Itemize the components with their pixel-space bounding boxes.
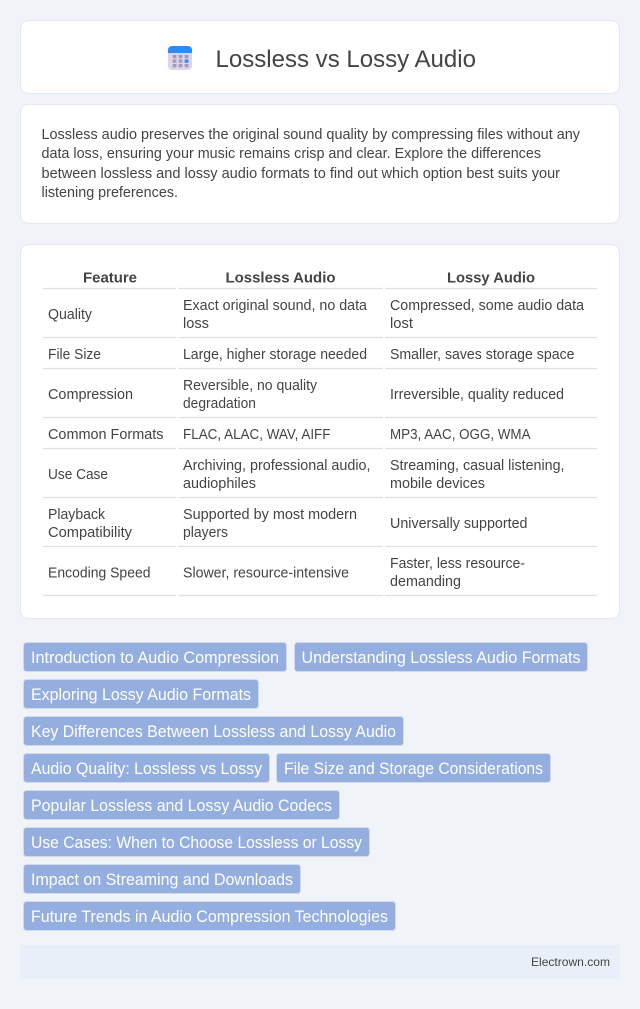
row: use case: Use Case	[48, 467, 108, 483]
tag: introduction: Introduction to Audio Compression	[31, 649, 279, 667]
tag: lossless formats: Understanding Lossless Audio Formats	[302, 649, 580, 667]
footer: Electrown.com	[531, 955, 610, 969]
panel: title header	[20, 20, 620, 94]
tag: future trends	[24, 902, 396, 930]
title: Lossless vs Lossy Audio	[216, 46, 476, 73]
table header: Lossless Audio	[226, 270, 336, 286]
row: playback compatibility	[48, 507, 528, 541]
row: quality	[48, 298, 584, 332]
row: playback compatibility: Compatibility	[48, 525, 133, 541]
row: use case: audiophiles	[183, 476, 256, 492]
table header: Feature	[83, 270, 137, 286]
row: file size: Large, higher storage needed	[183, 347, 367, 363]
row: playback compatibility: players	[183, 525, 228, 541]
row: compression: Irreversible, quality reduced	[390, 387, 564, 403]
row: encoding speed: Slower, resource-intensive	[183, 566, 349, 582]
row: file size: File Size	[48, 347, 101, 363]
row: encoding speed: Faster, less resource-	[390, 556, 525, 572]
tag: audio quality	[24, 754, 270, 782]
row: use case: Archiving, professional audio,	[183, 458, 370, 474]
panel: comparison table	[20, 244, 620, 618]
tag: file size: File Size and Storage Considerations	[284, 760, 543, 778]
row: file size	[48, 347, 575, 363]
tag: lossy formats	[24, 680, 258, 708]
tag: lossy formats: Exploring Lossy Audio Formats	[31, 686, 251, 704]
tag: streaming	[24, 864, 300, 894]
footer	[20, 945, 620, 979]
row: compression	[48, 378, 564, 412]
row: quality: Quality	[48, 307, 93, 323]
row: encoding speed	[48, 556, 525, 590]
panel: introduction	[20, 104, 620, 224]
tag: streaming: Impact on Streaming and Downloads	[31, 871, 293, 889]
icon: calendar grid	[168, 46, 192, 70]
tag: key differences	[24, 716, 404, 746]
row: encoding speed: Encoding Speed	[48, 566, 151, 582]
tag: use cases: Use Cases: When to Choose Lossless or Lossy	[31, 834, 363, 852]
tag: codecs: Popular Lossless and Lossy Audio Codecs	[31, 797, 332, 815]
tag: lossless formats	[294, 642, 588, 672]
row: common formats: MP3, AAC, OGG, WMA	[390, 427, 531, 443]
row: quality: Exact original sound, no data	[183, 298, 367, 314]
topic tags	[24, 642, 588, 930]
row: use case: Streaming, casual listening,	[390, 458, 564, 474]
row: common formats	[48, 427, 531, 443]
row: quality: lost	[390, 316, 413, 332]
row: compression: degradation	[183, 396, 256, 412]
table header	[83, 270, 535, 286]
row: file size: Smaller, saves storage space	[390, 347, 575, 363]
row: quality: Compressed, some audio data	[390, 298, 584, 314]
row: playback compatibility: Supported by most modern	[183, 507, 357, 523]
row: playback compatibility: Playback	[48, 507, 106, 523]
tag: codecs	[24, 790, 340, 820]
row: compression: Reversible, no quality	[183, 378, 318, 394]
row: use case	[48, 458, 564, 492]
tag: future trends: Future Trends in Audio Compression Technologies	[31, 908, 388, 926]
row: use case: mobile devices	[390, 476, 485, 492]
row: common formats: Common Formats	[48, 427, 164, 443]
row: common formats: FLAC, ALAC, WAV, AIFF	[183, 427, 331, 443]
table header: Lossy Audio	[447, 270, 535, 286]
intro text: data loss, ensuring your music remains crisp and clear. Explore the differences	[42, 146, 541, 162]
tag: audio quality: Audio Quality: Lossless vs Lossy	[31, 760, 263, 778]
tag: use cases	[24, 828, 370, 856]
row: compression: Compression	[48, 387, 133, 403]
tag: file size	[276, 754, 550, 782]
row: quality: loss	[183, 316, 209, 332]
tag: introduction	[24, 642, 286, 672]
intro text: listening preferences.	[42, 185, 178, 201]
row: playback compatibility: Universally supported	[390, 516, 528, 532]
tag: key differences: Key Differences Between Lossless and Lossy Audio	[31, 723, 396, 741]
intro text: between lossless and lossy audio formats to find out which option best suits your	[42, 166, 560, 182]
intro text: Lossless audio preserves the original sound quality by compressing files without any	[42, 127, 581, 143]
intro text	[42, 127, 581, 201]
row: encoding speed: demanding	[390, 574, 461, 590]
